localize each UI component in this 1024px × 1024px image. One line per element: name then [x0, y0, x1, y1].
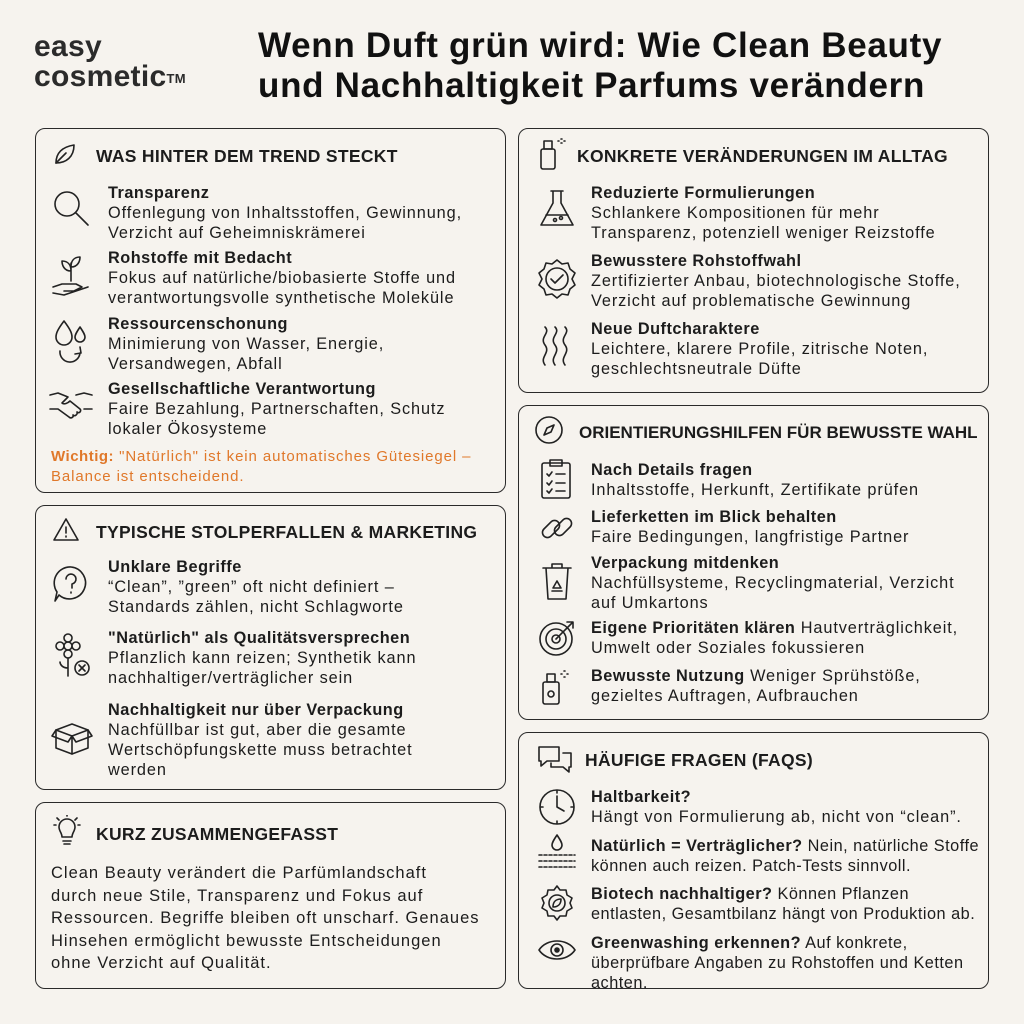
heading: KURZ ZUSAMMENGEFASST [96, 824, 338, 844]
item: verpackung [108, 701, 412, 779]
heading: ORIENTIERUNGSHILFEN FÜR BEWUSSTE WAHL [579, 423, 978, 442]
item: unklare begriffe [108, 558, 404, 616]
title: Wenn Duft grün wird: Wie Clean Beauty [258, 26, 942, 65]
panel: stolperfallen [35, 505, 506, 790]
item: rohstoffwahl: Verzicht auf problematische Gewinnung [591, 292, 911, 310]
icon: badge check [538, 259, 576, 299]
item: verpackung: Nachfüllsysteme, Recyclingmaterial, Verzicht [591, 574, 955, 592]
item: verpackung: Wertschöpfungskette muss betrachtet [108, 741, 412, 759]
item: transparenz: Offenlegung von Inhaltsstoffen, Gewinnung, [108, 204, 462, 222]
item: verpackung: werden [108, 761, 167, 779]
title [258, 26, 942, 105]
faq: vertraeglicher: können auch reizen. Patch-Tests sinnvoll. [591, 857, 911, 875]
icon: skin drop [537, 833, 577, 871]
item: ressourcen: Minimierung von Wasser, Energie, [108, 335, 384, 353]
icon: clock [537, 787, 577, 827]
panel: trend [35, 128, 506, 493]
icon: chain [542, 518, 572, 538]
item: verpackung [591, 554, 955, 612]
icon: bulb [53, 815, 81, 845]
faq: greenwashing [591, 933, 964, 993]
item: duftcharaktere: Neue Duftcharaktere [591, 320, 760, 338]
icon: spray small [542, 670, 569, 705]
item: formulierungen: Reduzierte Formulierungen [591, 184, 815, 202]
heading: HÄUFIGE FRAGEN (FAQS) [585, 750, 813, 770]
summary text [51, 864, 480, 972]
icon: target [539, 621, 574, 656]
item: details: Inhaltsstoffe, Herkunft, Zertifikate prüfen [591, 481, 919, 499]
item: verpackung: Nachfüllbar ist gut, aber die gesamte [108, 721, 406, 739]
item: nutzung [591, 667, 921, 705]
summary text: ohne Verzicht auf Qualität. [51, 954, 272, 972]
heading: WAS HINTER DEM TREND STECKT [96, 146, 398, 166]
item: duftcharaktere: Leichtere, klarere Profile, zitrische Noten, [591, 340, 928, 358]
logo: cosmeticTM [34, 60, 186, 93]
item: verantwortung: Faire Bezahlung, Partnerschaften, Schutz [108, 400, 445, 418]
item: rohstoffe: Fokus auf natürliche/biobasierte Stoffe und [108, 269, 456, 287]
item: rohstoffe: Rohstoffe mit Bedacht [108, 249, 292, 267]
callout: wichtig: Wichtig: "Natürlich" ist kein automatisches Gütesiegel – [51, 448, 471, 465]
icon: leaf [55, 144, 75, 164]
item: unklare begriffe: Standards zählen, nicht Schlagworte [108, 598, 404, 616]
icon: spray [540, 138, 566, 170]
icon: recycle bin [542, 563, 572, 600]
item: verantwortung: Gesellschaftliche Verantwortung [108, 380, 376, 398]
icon: water drops [55, 320, 86, 363]
heading: KONKRETE VERÄNDERUNGEN IM ALLTAG [577, 146, 948, 166]
icon: warning [53, 518, 79, 541]
faq: greenwashing: überprüfbare Angaben zu Rohstoffen und Ketten [591, 954, 964, 972]
item: lieferketten [591, 508, 909, 546]
faq: greenwashing: achten. [591, 974, 648, 992]
item: duftcharaktere: geschlechtsneutrale Düfte [591, 360, 802, 378]
item: rohstoffwahl: Bewusstere Rohstoffwahl [591, 252, 802, 270]
item: natuerlich: "Natürlich" als Qualitätsversprechen [108, 629, 410, 647]
item: natuerlich [108, 629, 416, 687]
heading: TYPISCHE STOLPERFALLEN & MARKETING [96, 522, 477, 542]
item: ressourcen [108, 315, 384, 373]
icon: flask [540, 190, 574, 226]
logo: easy [34, 30, 102, 63]
icon: chat bubbles [538, 746, 572, 773]
icon: flower x [55, 633, 90, 677]
item: lieferketten: Faire Bedingungen, langfristige Partner [591, 528, 909, 546]
summary text: Clean Beauty verändert die Parfümlandschaft [51, 864, 427, 882]
faq: haltbarkeit [591, 787, 962, 827]
logo [34, 30, 186, 93]
item: unklare begriffe: “Clean”, ”green” oft nicht definiert – [108, 578, 395, 596]
item: verpackung: auf Umkartons [591, 594, 709, 612]
item: natuerlich: nachhaltiger/verträglicher sein [108, 669, 353, 687]
panel: faqs [518, 732, 989, 989]
item: lieferketten: Lieferketten im Blick behalten [591, 508, 837, 526]
icon: checklist [541, 459, 571, 499]
faq: vertraeglicher: Natürlich = Verträglicher? Nein, natürliche Stoffe [591, 837, 979, 855]
item: ressourcen: Versandwegen, Abfall [108, 355, 283, 373]
item: formulierungen [591, 184, 936, 242]
callout: wichtig [51, 448, 471, 485]
item: prioritaeten [591, 619, 958, 657]
panel: orientierungshilfen [518, 405, 989, 720]
icon: question bubble [53, 566, 86, 602]
item: unklare begriffe: Unklare Begriffe [108, 558, 242, 576]
item: natuerlich: Pflanzlich kann reizen; Synthetik kann [108, 649, 416, 667]
item: formulierungen: Transparenz, potenziell weniger Reizstoffe [591, 224, 936, 242]
icon: eye [537, 935, 577, 965]
icon: scent waves [542, 326, 568, 366]
icon: compass [535, 416, 563, 444]
item: ressourcen: Ressourcenschonung [108, 315, 288, 333]
faq: haltbarkeit: Hängt von Formulierung ab, nicht von “clean”. [591, 808, 962, 826]
panel: veraenderungen [518, 128, 989, 393]
item: verpackung: Nachhaltigkeit nur über Verpackung [108, 701, 404, 719]
item: prioritaeten: Eigene Prioritäten klären Hautverträglichkeit, [591, 619, 958, 637]
icon: magnifier [54, 191, 89, 226]
item: verantwortung: lokaler Ökosysteme [108, 420, 267, 438]
item: verantwortung [108, 380, 445, 438]
item: rohstoffwahl: Zertifizierter Anbau, biotechnologische Stoffe, [591, 272, 961, 290]
faq: greenwashing: Greenwashing erkennen? Auf konkrete, [591, 934, 908, 952]
faq: biotech: entlasten, Gesamtbilanz hängt von Produktion ab. [591, 905, 975, 923]
icon: plant hand [52, 256, 89, 296]
summary text: Ressourcen. Begriffe bleiben oft unscharf. Genaues [51, 909, 480, 927]
callout: wichtig: Balance ist entscheidend. [51, 468, 244, 485]
item: prioritaeten: Umwelt oder Soziales fokussieren [591, 639, 865, 657]
item: duftcharaktere [591, 320, 928, 378]
faq: biotech: Biotech nachhaltiger? Können Pflanzen [591, 885, 909, 903]
item: formulierungen: Schlankere Kompositionen für mehr [591, 204, 880, 222]
faq: haltbarkeit: Haltbarkeit? [591, 788, 691, 806]
item: rohstoffwahl [591, 252, 961, 310]
faq: vertraeglicher [591, 836, 979, 876]
item: transparenz: Transparenz [108, 184, 209, 202]
title: und Nachhaltigkeit Parfums verändern [258, 66, 925, 105]
item: nutzung: Bewusste Nutzung Weniger Sprühstöße, [591, 667, 921, 685]
icon: handshake [49, 392, 93, 419]
item: details [591, 461, 919, 499]
item: details: Nach Details fragen [591, 461, 753, 479]
icon: gear leaf [537, 883, 577, 923]
item: transparenz: Verzicht auf Geheimniskrämerei [108, 224, 366, 242]
item: verpackung: Verpackung mitdenken [591, 554, 779, 572]
item: transparenz [108, 184, 462, 242]
summary text: durch neue Stile, Transparenz und Fokus auf [51, 886, 423, 904]
item: rohstoffe: verantwortungsvolle synthetische Moleküle [108, 289, 454, 307]
faq: biotech [591, 884, 975, 924]
item: rohstoffe [108, 249, 456, 307]
icon: box [51, 723, 93, 755]
panel: kurz zusammengefasst [35, 802, 506, 989]
item: nutzung: gezieltes Auftragen, Aufbrauchen [591, 687, 859, 705]
summary text: Hinsehen ermöglicht bewusste Entscheidungen [51, 932, 442, 950]
